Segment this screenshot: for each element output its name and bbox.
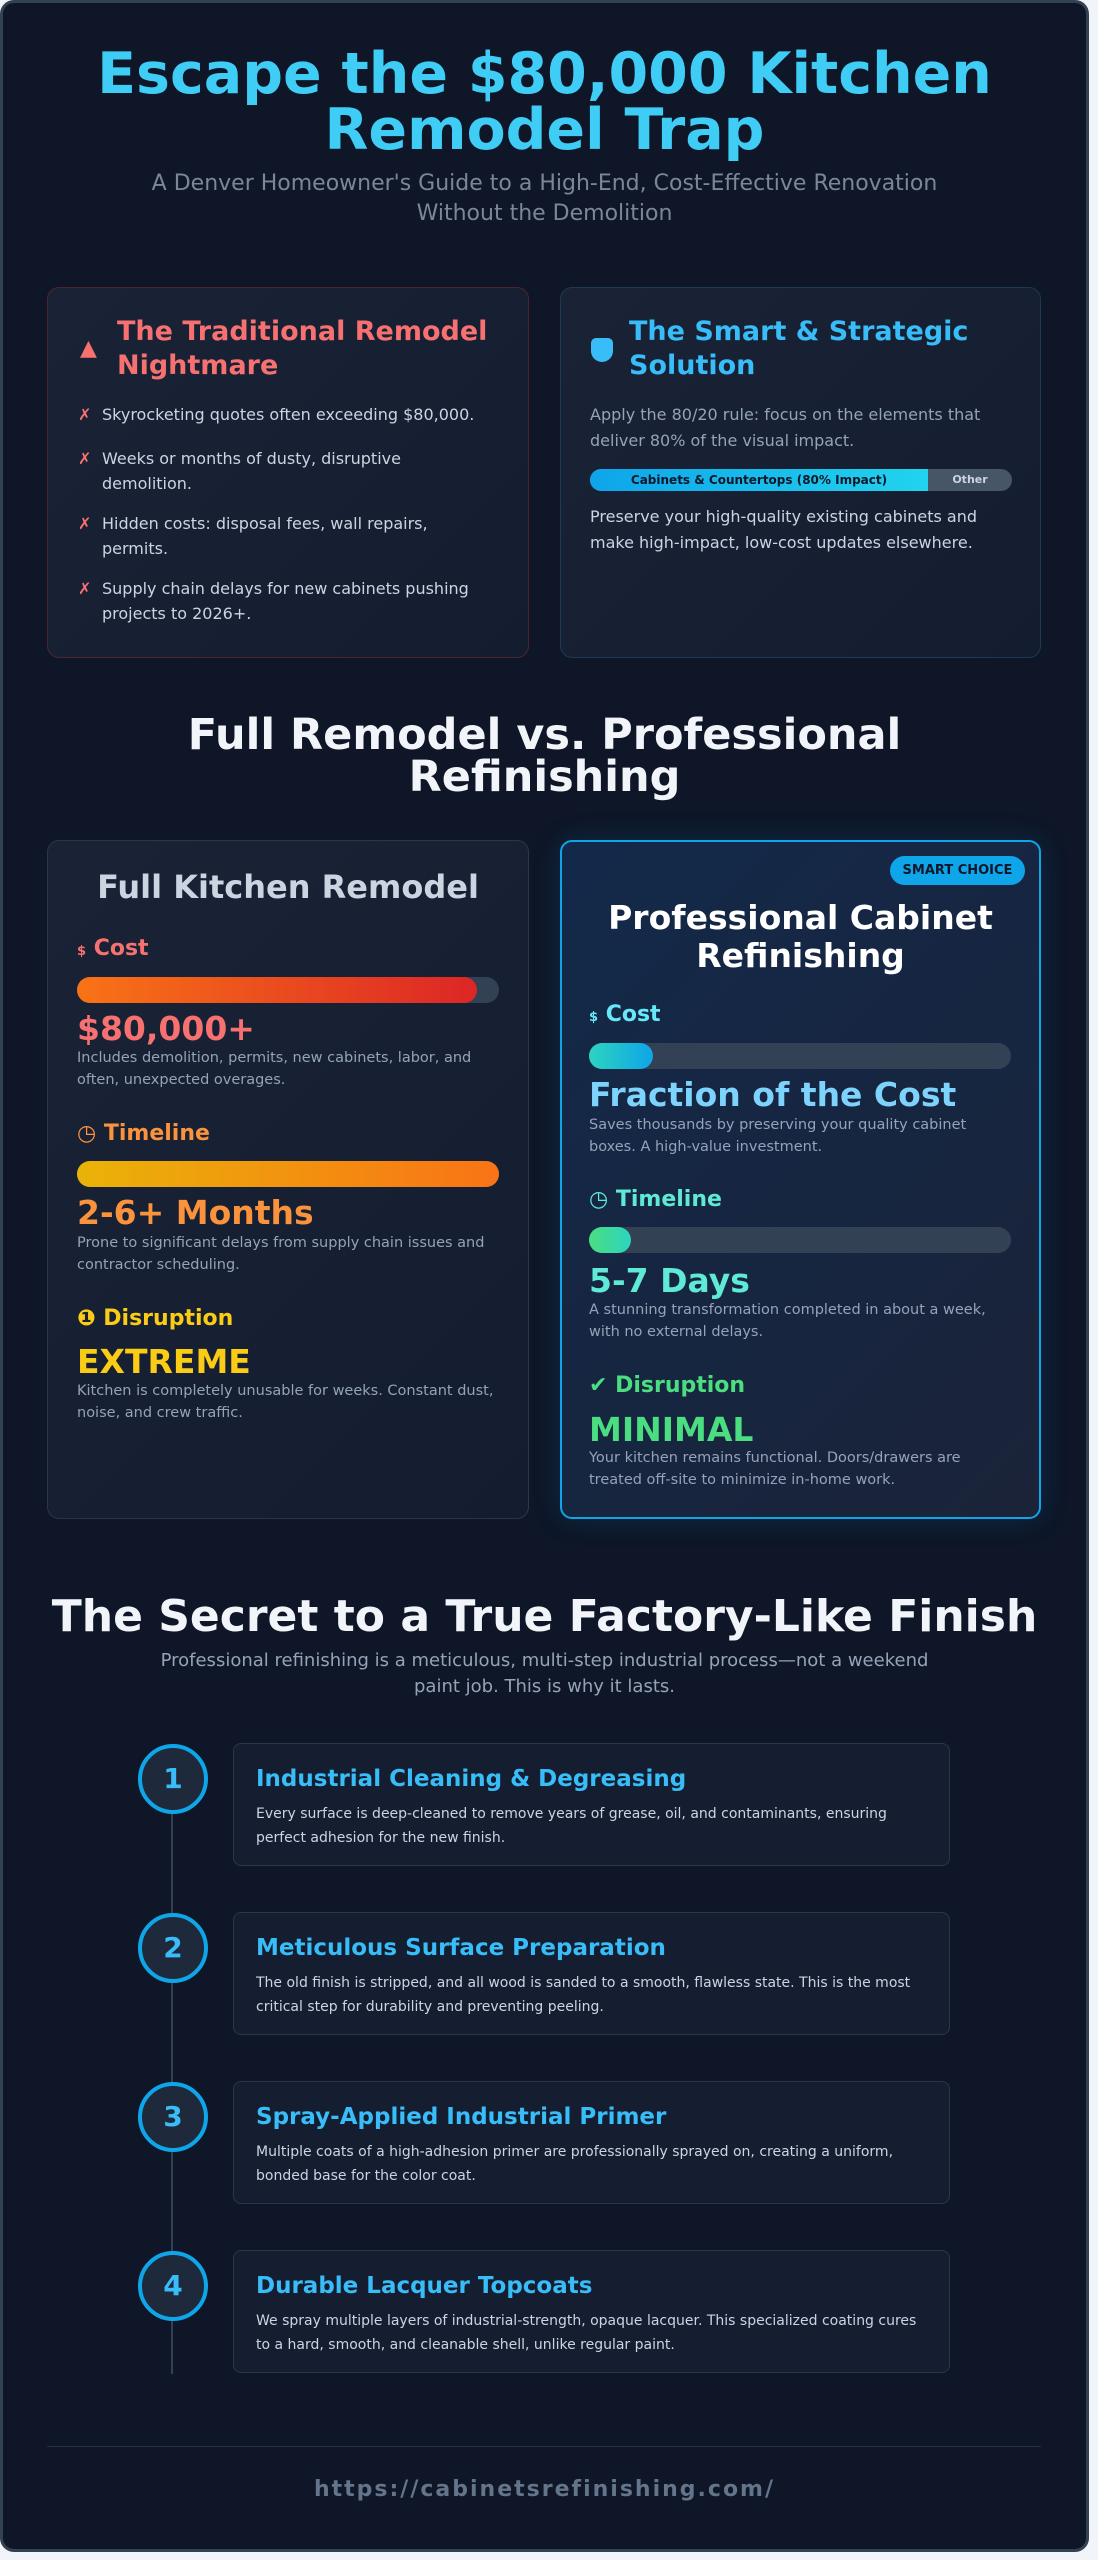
circle 2 xyxy=(138,1913,208,1983)
text 2: Preserve your high-quality existing cabinets and make high-impact, low-cost updates elsewhere. xyxy=(590,507,977,552)
section subtitle: Professional refinishing is a meticulous, multi-step industrial process—not a weekend xyxy=(161,1650,928,1671)
cost desc: Includes demolition, permits, new cabinets, labor, and often, unexpected overages. xyxy=(77,1050,471,1088)
circle 4 xyxy=(138,2251,208,2321)
card: refinishing xyxy=(560,840,1041,1519)
card: full remodel xyxy=(47,840,529,1519)
heading: The Traditional Remodel xyxy=(117,316,487,347)
section heading: comparison xyxy=(188,710,901,802)
panel: traditional nightmare xyxy=(47,287,529,658)
title: Remodel Trap xyxy=(325,97,764,163)
panel: traditional nightmare: permits. xyxy=(102,539,168,558)
circle 1 xyxy=(138,1744,208,1814)
card title xyxy=(608,898,993,975)
card title: Refinishing xyxy=(696,936,905,975)
cost value: Fraction of the Cost xyxy=(589,1075,956,1114)
heading: The Smart & Strategic xyxy=(629,316,968,347)
disruption value: MINIMAL xyxy=(589,1410,753,1449)
heading: Solution xyxy=(629,350,755,381)
step card 4: We spray multiple layers of industrial-strength, opaque lacquer. This specialized coating cures to a hard, smooth, and cleanable shell, unlike regular paint. xyxy=(256,2313,916,2353)
bar: 80/20: Other xyxy=(952,473,988,486)
panel: traditional nightmare: ✗ xyxy=(78,579,91,598)
step card 1: Industrial Cleaning & Degreasing xyxy=(256,1766,686,1792)
bullet list xyxy=(78,405,474,623)
subtitle xyxy=(152,171,937,226)
step card 2: The old finish is stripped, and all wood is sanded to a smooth, flawless state. This is the most critical step for durability and preventing peeling. xyxy=(256,1975,910,2015)
card title: Full Kitchen Remodel xyxy=(97,868,479,906)
heading xyxy=(117,316,487,381)
step card 3: Spray-Applied Industrial Primer xyxy=(256,2104,666,2130)
card title: Professional Cabinet xyxy=(608,898,993,937)
step 1 xyxy=(138,1743,950,1866)
step 3 xyxy=(138,2081,950,2204)
step card 3: Multiple coats of a high-adhesion primer are professionally sprayed on, creating a uniform, bonded base for the color coat. xyxy=(256,2144,893,2184)
subtitle: Without the Demolition xyxy=(417,201,672,226)
panel: traditional nightmare: projects to 2026+. xyxy=(102,604,251,623)
timeline desc: Prone to significant delays from supply chain issues and contractor scheduling. xyxy=(77,1235,484,1273)
timeline value: 2-6+ Months xyxy=(77,1193,314,1232)
panel: traditional nightmare: ✗ xyxy=(78,514,91,533)
panel: smart solution xyxy=(560,287,1041,658)
badge xyxy=(890,856,1025,885)
section subtitle xyxy=(161,1650,928,1697)
cost value: $80,000+ xyxy=(77,1009,255,1048)
circle 3: 3 xyxy=(163,2100,183,2133)
step card 1: Every surface is deep-cleaned to remove years of grease, oil, and contaminants, ensuring perfect adhesion for the new finish. xyxy=(256,1806,887,1846)
timeline bar xyxy=(589,1227,1011,1253)
heading: Nightmare xyxy=(117,350,278,381)
panel: traditional nightmare: Skyrocketing quotes often exceeding $80,000. xyxy=(102,405,474,424)
timeline label: ◷ Timeline xyxy=(589,1187,722,1212)
disruption label: ❶ Disruption xyxy=(77,1306,233,1331)
cost bar xyxy=(589,1043,1011,1069)
panel: traditional nightmare: Weeks or months of dusty, disruptive xyxy=(102,449,401,468)
timeline label: ◷ Timeline xyxy=(77,1121,210,1146)
step card 4 xyxy=(233,2250,950,2373)
icon: shield xyxy=(591,338,613,362)
badge: SMART CHOICE xyxy=(903,863,1012,878)
circle 1: 1 xyxy=(163,1762,183,1795)
bar: 80/20 xyxy=(590,469,1012,491)
panel: traditional nightmare: Supply chain delays for new cabinets pushing xyxy=(102,579,469,598)
cost label: $ Cost xyxy=(77,936,149,961)
disruption value: EXTREME xyxy=(77,1342,251,1381)
step card 2: Meticulous Surface Preparation xyxy=(256,1935,666,1961)
step 2 xyxy=(138,1912,950,2035)
timeline bar xyxy=(77,1161,499,1187)
circle 4: 4 xyxy=(163,2269,183,2302)
step card 1 xyxy=(233,1743,950,1866)
bar: 80/20: Cabinets & Countertops (80% Impact) xyxy=(631,473,887,487)
step 4 xyxy=(138,2250,950,2373)
step card 4: Durable Lacquer Topcoats xyxy=(256,2273,592,2299)
icon: warning: ▲ xyxy=(80,336,97,361)
cost bar xyxy=(77,977,499,1003)
title: Escape the $80,000 Kitchen xyxy=(97,41,992,107)
section heading: comparison: Full Remodel vs. Professional xyxy=(188,710,901,760)
heading xyxy=(629,316,968,381)
cost label: $ Cost xyxy=(589,1002,661,1027)
title xyxy=(97,41,992,163)
circle 2: 2 xyxy=(163,1931,183,1964)
disruption desc: Your kitchen remains functional. Doors/drawers are treated off-site to minimize in-home work. xyxy=(589,1450,961,1488)
step card 3 xyxy=(233,2081,950,2204)
timeline value: 5-7 Days xyxy=(589,1261,750,1300)
panel: traditional nightmare: ✗ xyxy=(78,405,91,424)
timeline desc: A stunning transformation completed in about a week, with no external delays. xyxy=(589,1302,986,1340)
panel: traditional nightmare: Hidden costs: disposal fees, wall repairs, xyxy=(102,514,428,533)
disruption label: ✔ Disruption xyxy=(589,1373,745,1398)
footer url: https://cabinetsrefinishing.com/ xyxy=(314,2477,775,2502)
circle 3 xyxy=(138,2082,208,2152)
section heading: factory finish: The Secret to a True Factory-Like Finish xyxy=(52,1591,1037,1642)
timeline line xyxy=(171,1779,173,2374)
step card 2 xyxy=(233,1912,950,2035)
panel: traditional nightmare: demolition. xyxy=(102,474,192,493)
cost desc: Saves thousands by preserving your quality cabinet boxes. A high-value investment. xyxy=(589,1117,966,1155)
section heading: comparison: Refinishing xyxy=(409,752,680,802)
text: Apply the 80/20 rule: focus on the elements that deliver 80% of the visual impact. xyxy=(590,405,980,450)
section subtitle: paint job. This is why it lasts. xyxy=(414,1676,675,1697)
subtitle: A Denver Homeowner's Guide to a High-End, Cost-Effective Renovation xyxy=(152,171,937,196)
disruption desc: Kitchen is completely unusable for weeks. Constant dust, noise, and crew traffic. xyxy=(77,1383,493,1421)
panel: traditional nightmare: ✗ xyxy=(78,449,91,468)
